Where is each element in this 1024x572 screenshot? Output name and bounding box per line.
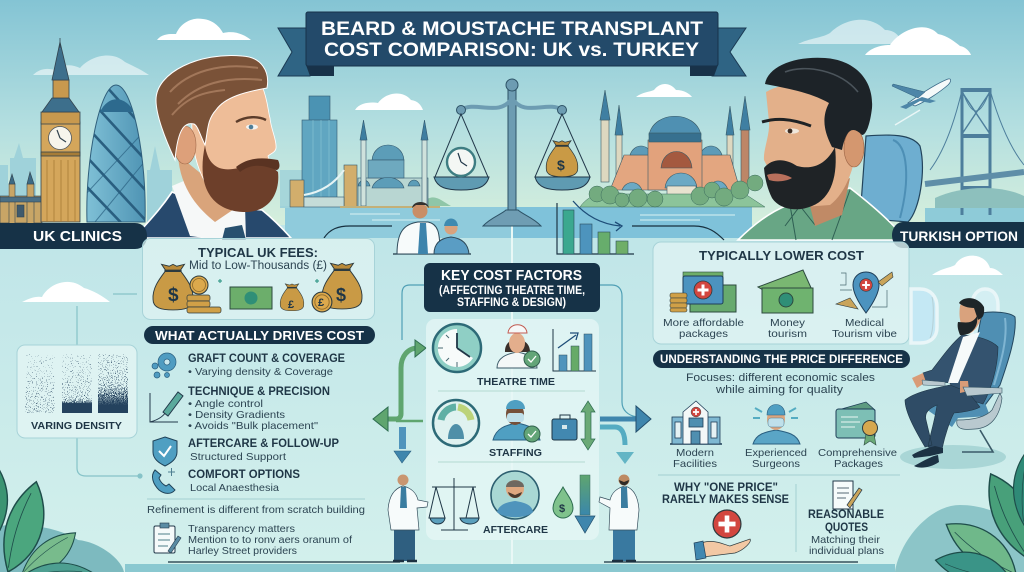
decorative rounded contour lines [168,226,858,562]
text: focuses: while aiming for quality [715,384,844,396]
icon: scales [429,478,479,530]
heading pill: understanding the price difference: UNDERSTANDING THE PRICE DIFFERENCE [660,352,903,366]
Bosphorus bridge [925,88,1024,215]
driver: graft count: GRAFT COUNT & COVERAGE [188,353,345,365]
driver: technique: • Avoids "Bulk placement" [188,420,318,432]
icon: comprehensive package certificate [836,402,878,445]
passenger in seat [900,298,1015,469]
note: transparency: Harley Street providers [188,545,297,557]
icon: money drop: $ [559,503,565,515]
right pan with money bag: $ [557,157,565,173]
icon: hospital [670,401,722,444]
panel: key factors [426,319,599,540]
seat back [965,312,1015,405]
arrow: blue down left [394,427,411,463]
panel: varying density: VARING DENSITY [31,420,122,432]
jacket [923,335,998,404]
background lower panel [0,225,1024,572]
hands [912,373,969,393]
London skyline [0,38,305,232]
captions: modern, surgeons, packages: Comprehensive [818,447,897,459]
block: why one price [658,475,900,560]
icon: pound coin and dollar bag [312,263,362,312]
icon: medical tourism pin [836,272,893,313]
UK clinics tag [0,223,147,249]
small falling bar chart [557,201,634,254]
doctor: left [388,474,428,561]
ear [844,129,864,167]
panel: typical UK fees [142,238,374,320]
captions: modern, surgeons, packages: Packages [834,458,883,470]
mini skyline: tower, bridge and mosque [280,96,451,208]
parliament building [0,172,42,224]
ear [174,126,196,164]
icon: affordable packages [670,272,736,312]
green shirt [738,188,906,240]
hair [156,55,268,160]
face [192,79,276,205]
Gherkin [86,84,146,222]
note: transparency: Transparency matters [188,523,295,535]
side connector lines [77,294,142,478]
driver: comfort [188,469,300,494]
note: refinement: Refinement is different from scratch building [147,504,365,516]
panel: typically lower cost: TYPICALLY LOWER COST [699,248,864,263]
label: aftercare: AFTERCARE [483,524,548,536]
leaves: bottom right [895,447,1024,572]
block: why one price: RARELY MAKES SENSE [662,494,789,506]
armrests [963,387,1002,396]
captions: modern, surgeons, packages: Facilities [673,458,717,470]
bottom strip [125,564,895,572]
central balance scale [434,79,590,226]
panel: typically lower cost [653,242,909,344]
block: reasonable quotes: QUOTES [825,522,868,534]
list: cost drivers [150,353,345,494]
panel: typically lower cost: Tourism vibe [832,328,897,340]
trousers [905,385,980,449]
captions: More affordable [663,317,744,329]
icon: pound coin and dollar bag: £ [318,297,324,309]
panel: typical UK fees: TYPICAL UK FEES: [198,245,318,260]
Turkish option tag [892,222,1024,248]
face [764,84,858,208]
neck and collar [172,180,246,240]
connector lines to key factors [402,285,638,417]
ribbon tails [278,28,310,76]
icon: clipboard [154,523,181,553]
driver: technique [188,386,330,432]
block: reasonable quotes: individual plans [809,545,884,557]
icon: money bag with coins: $ [168,285,179,306]
text: focuses: Focuses: different economic scales [686,372,876,384]
heading: key cost factors: (AFFECTING THEATRE TIME, [439,285,585,297]
block: why one price: WHY "ONE PRICE" [674,482,778,494]
driver: graft count [188,353,345,378]
driver: comfort: Local Anaesthesia [190,482,279,494]
icon: clock [433,324,481,372]
title banner [278,12,746,76]
arrow: blue right [600,406,651,464]
man: Turkish portrait [738,58,922,240]
label: staffing: STAFFING [489,447,542,459]
seat floor shadow [900,445,1006,469]
panel: typically lower cost: tourism [768,328,807,340]
man: UK portrait [134,55,291,240]
airline seat [860,135,922,222]
icon: money bag with coins [153,264,221,313]
icon: long down arrow [575,475,595,533]
Turkish option tag: TURKISH OPTION [900,228,1018,244]
beard [764,147,836,209]
block: reasonable quotes [808,481,884,557]
arrow: green two-way [373,340,426,431]
title text: BEARD & MOUSTACHE TRANSPLANT [321,19,703,40]
shoes [912,446,943,468]
heading: key cost factors: KEY COST FACTORS [441,268,582,284]
Big Ben [41,38,80,222]
block: reasonable quotes: REASONABLE [808,509,884,521]
icon: gauge [433,400,479,446]
neck [808,178,850,226]
driver: technique: • Angle control [188,398,263,410]
icon: rising chart [553,329,596,371]
moustache [236,158,279,172]
airplane [892,79,951,125]
panel: typically lower cost: Medical [845,317,884,329]
driver: technique: • Density Gradients [188,409,285,421]
driver: aftercare: AFTERCARE & FOLLOW-UP [188,438,339,450]
eye and brow [236,117,266,122]
panel: typically lower cost: Money [770,317,806,329]
panel: typically lower cost: packages [679,328,728,340]
captions: modern, surgeons, packages: Experienced [745,447,807,459]
banner body [306,12,718,66]
pale background buildings [0,143,305,224]
driver: aftercare [188,438,339,463]
heading: key cost factors [424,263,600,312]
cabin windows [911,289,998,343]
icon: experienced surgeon [753,404,800,444]
icon: pound coin and dollar bag: $ [336,285,346,305]
leaves: bottom left [0,439,124,572]
icon: banknote [230,287,272,309]
seat cushion [923,400,990,427]
text: focuses [686,372,876,396]
Hagia Sophia [600,90,750,206]
panel: typical UK fees: Mid to Low-Thousands (£) [189,260,327,272]
title banner: COST COMPARISON: UK vs. TURKEY [324,40,699,61]
icon: shield [153,437,177,466]
captions: modern, surgeons, packages: Modern [676,447,714,459]
beard [203,145,278,212]
icon: graft gear [152,353,176,378]
driver: technique: TECHNIQUE & PRECISION [188,386,330,398]
hair [765,58,872,150]
panel: varying density [17,345,137,438]
icon: nurse [497,325,540,368]
clouds [22,19,1003,302]
captions: modern, surgeons, packages [673,447,897,470]
driver: graft count: • Varying density & Coverage [188,366,333,378]
label: theatre time: THEATRE TIME [477,376,555,388]
background sky [0,0,1024,232]
heading: key cost factors: STAFFING & DESIGN) [457,297,566,309]
heading pill: what actually drives cost: WHAT ACTUALLY DRIVES COST [155,328,364,343]
driver: aftercare: Structured Support [190,451,286,463]
icon: angle and pen [150,392,183,422]
left pan with clock [434,114,489,190]
block: reasonable quotes: Matching their [811,534,881,546]
icon: phone [152,468,175,493]
icon: briefcase and range arrow [552,401,595,450]
captions: modern, surgeons, packages: Surgeons [752,458,800,470]
brow and eye [762,119,811,126]
background river and skyline bands [285,200,1024,565]
icon: document and pen [833,481,862,509]
driver: comfort: COMFORT OPTIONS [188,469,300,481]
icon: small pound bag: £ [288,299,294,311]
icon: masked surgeon [493,400,540,442]
doctor: right [599,474,639,561]
small doctors top centre [393,202,471,254]
trees and green island [580,175,765,207]
icon: doctor portrait circle [491,471,539,519]
right pan with money bag [535,114,590,190]
note: transparency: Mention to to ronv aers oranum of [188,534,352,546]
seat base and legs [957,393,1002,429]
icon: money [758,270,813,313]
shirt [948,332,980,383]
icon: money drop [553,487,573,518]
suit [134,192,291,238]
icon: red cross above hand [694,510,750,560]
UK clinics tag: UK CLINICS [33,228,122,245]
density swatches [25,354,55,413]
icon: small pound bag [280,284,304,311]
note: transparency [188,523,352,557]
head [959,302,982,334]
